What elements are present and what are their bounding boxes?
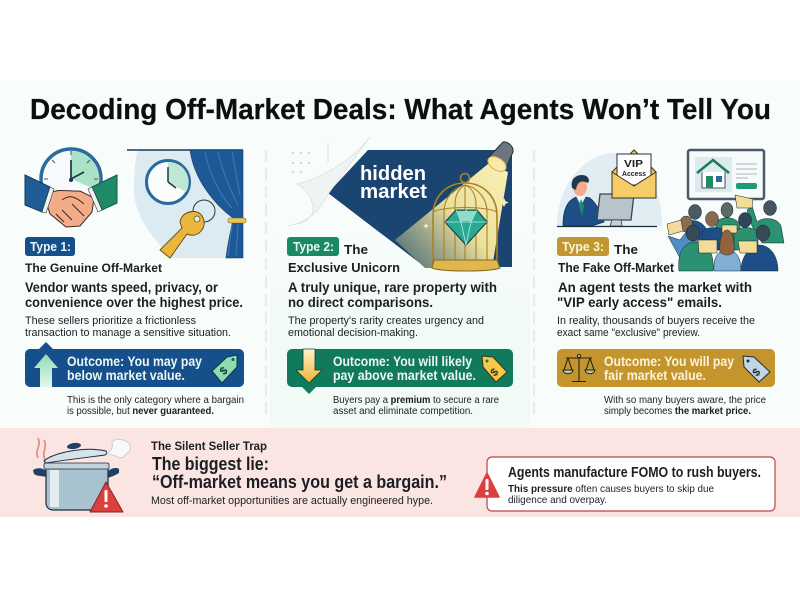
icon: VIP access envelope: VIP (624, 159, 643, 170)
icon: VIP access envelope: Access (622, 171, 646, 178)
icon: golden cage (432, 174, 500, 271)
icon: balance scales (563, 354, 595, 382)
description: exact same "exclusive" preview. (557, 327, 700, 339)
outcome banner (557, 349, 775, 387)
middle row (702, 228, 726, 250)
key statement: A truly unique, rare property with (288, 279, 497, 295)
type badge: Type 1: (30, 239, 71, 254)
key statement: Vendor wants speed, privacy, or (25, 279, 218, 295)
type badge: Type 2: (293, 239, 334, 254)
outcome banner: fair market value. (604, 368, 706, 383)
key statement: An agent tests the market with (558, 279, 752, 295)
text: hidden market (360, 163, 427, 203)
outcome banner: below market value. (67, 368, 185, 383)
front row (679, 242, 713, 271)
type badge (557, 237, 609, 256)
icon: down arrow (296, 349, 322, 383)
heading: Exclusive Unicorn (288, 260, 400, 275)
icon: diamond (445, 210, 487, 245)
outcome note (333, 395, 499, 417)
icon: price tag (743, 356, 770, 382)
panel: type 3 fake off-market (557, 150, 784, 417)
monitor (597, 194, 634, 226)
outcome note: Buyers pay a premium to secure a rare (333, 395, 499, 406)
supporting text: Most off-market opportunities are actually engineered hype. (151, 495, 433, 507)
main statement (152, 454, 447, 492)
icon: price tag: $ (488, 366, 501, 379)
key statement (288, 279, 497, 310)
icon: price tag (482, 356, 507, 382)
outcome note: is possible, but never guaranteed. (67, 406, 214, 417)
description: transaction to manage a sensitive situation. (25, 327, 231, 339)
panel: type 2 exclusive unicorn (287, 137, 513, 417)
callout: FOMO warning (475, 457, 775, 511)
outcome banner (287, 349, 513, 394)
description (557, 315, 755, 339)
outcome banner (25, 342, 244, 387)
key statement (25, 279, 243, 310)
illustration: property listing screen (688, 150, 764, 199)
description (288, 315, 484, 339)
key statement: convenience over the highest price. (25, 294, 243, 310)
outcome banner: pay above market value. (333, 368, 476, 383)
icon: price tag: $ (750, 366, 763, 379)
icon: warning triangle (475, 473, 499, 497)
callout: FOMO warning: This pressure often causes buyers to skip due (508, 483, 714, 495)
illustration: crowd of buyers with envelopes (667, 195, 784, 271)
outcome note: asset and eliminate competition. (333, 406, 473, 417)
envelopes held up (735, 195, 753, 208)
outcome note (604, 395, 766, 417)
icon: handshake and clock (25, 149, 117, 227)
outcome note: This is the only category where a bargain (67, 395, 244, 406)
icon: curtain, clock and key (127, 150, 246, 258)
icon: boiling pot with warning (33, 438, 130, 512)
agent at desk (563, 175, 604, 226)
heading: The (344, 242, 368, 257)
text: hidden market: hidden (360, 163, 426, 185)
panel: type 1 genuine off-market (25, 149, 246, 417)
outcome note: With so many buyers aware, the price (604, 395, 766, 406)
heading: The Genuine Off-Market (25, 261, 162, 275)
outcome banner: Outcome: You may pay (67, 354, 202, 369)
description: In reality, thousands of buyers receive the (557, 315, 755, 327)
panel: silent seller trap banner (0, 428, 800, 517)
callout: FOMO warning: diligence and overpay. (508, 494, 607, 506)
illustration: agent sending VIP access emails (557, 150, 662, 226)
title: Decoding Off-Market Deals: What Agents Won’t Tell You (30, 94, 771, 126)
heading (288, 242, 400, 275)
heading: The (614, 242, 638, 257)
description: The property's rarity creates urgency and (288, 315, 484, 327)
illustration: hidden market reveal and gilded cage (288, 137, 513, 271)
heading: The Fake Off-Market (558, 261, 675, 275)
back row (686, 220, 708, 244)
type badge: Type 3: (562, 239, 604, 254)
description: These sellers prioritize a frictionless (25, 315, 197, 327)
outcome banner: Outcome: You will pay (604, 354, 734, 369)
icon: price tag (212, 355, 237, 383)
outcome note (67, 395, 244, 417)
description (25, 315, 231, 339)
icon: up arrow (34, 354, 58, 387)
spotlight lamp (485, 142, 513, 174)
main statement: The biggest lie: (152, 454, 269, 474)
type badge (287, 237, 339, 256)
main statement: “Off-market means you get a bargain.” (152, 472, 447, 492)
callout: FOMO warning: Agents manufacture FOMO to rush buyers. (508, 465, 761, 481)
key statement: "VIP early access" emails. (557, 294, 722, 310)
icon: price tag: $ (218, 365, 230, 378)
outcome note: simply becomes the market price. (604, 406, 751, 417)
icon: VIP access envelope (612, 150, 656, 198)
text: hidden market: market (360, 181, 427, 203)
outcome banner: Outcome: You will likely (333, 354, 472, 369)
heading: The Silent Seller Trap (151, 441, 267, 453)
spotlight beam (395, 164, 508, 268)
key statement: no direct comparisons. (288, 294, 433, 310)
key statement (557, 279, 752, 310)
description: emotional decision-making. (288, 327, 418, 339)
heading (558, 242, 675, 275)
